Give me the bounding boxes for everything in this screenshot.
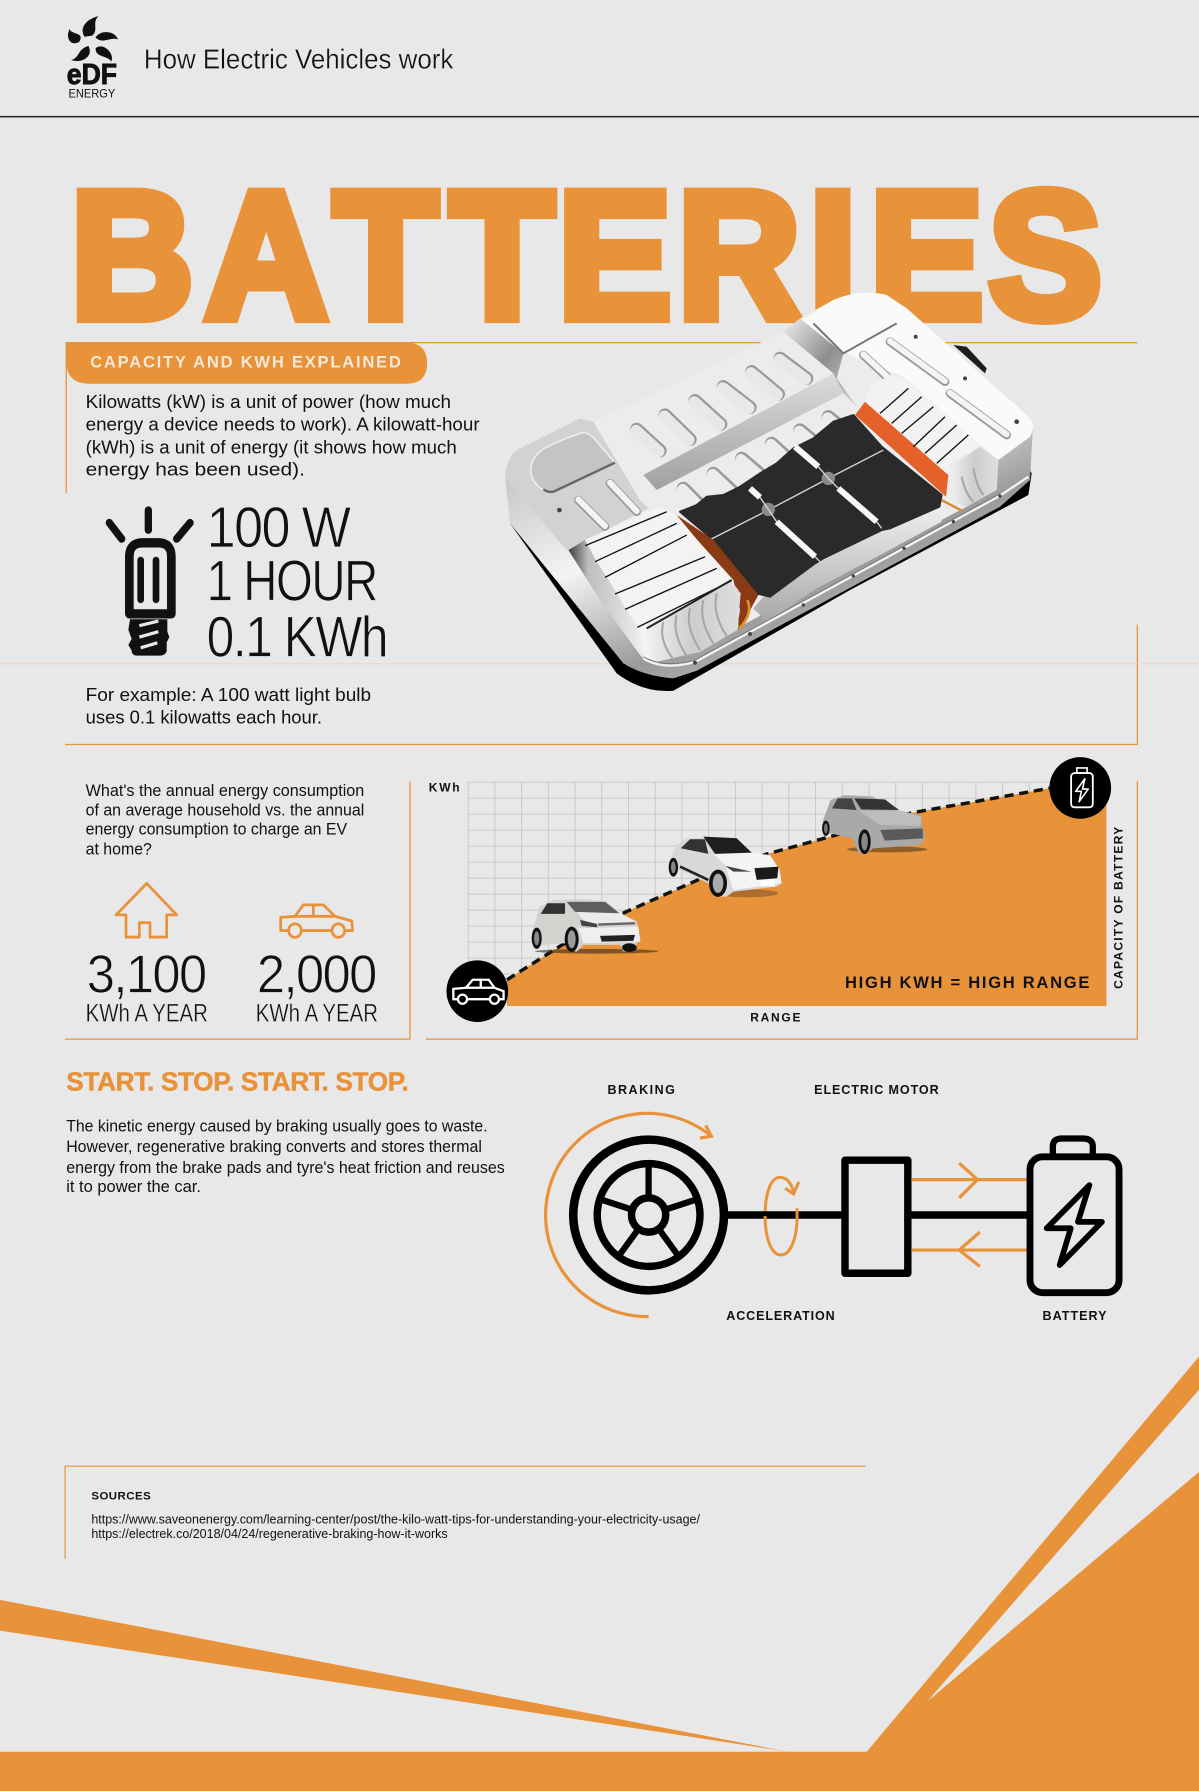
text block: light bulb example: For example: A 100 watt light bulb (86, 684, 371, 705)
rotation arrow: axle front (765, 1208, 797, 1255)
logo: EDF Energy: ENERGY (69, 87, 115, 101)
diagram: regenerative braking (546, 1083, 1119, 1323)
stat: household 3,100 kWh (86, 944, 208, 1027)
y-axis label: KWh (429, 780, 460, 794)
text block: kilowatts explanation: energy a device needs to work). A kilowatt-hour (86, 414, 480, 435)
text block: regenerative braking: However, regenerative braking converts and stores thermal (66, 1137, 482, 1156)
main heading: BATTERIES (71, 155, 1102, 357)
icon: car badge (446, 960, 508, 1022)
stat: 100 W 1 hour 0.1 kWh (207, 496, 387, 670)
right cell stack (865, 375, 982, 475)
logo: EDF Energy (67, 17, 117, 101)
stat: EV 2,000 kWh (256, 944, 378, 1027)
text block: regenerative braking: it to power the car. (66, 1177, 201, 1196)
stat: household 3,100 kWh: 3,100 (87, 944, 206, 1004)
x-axis label: RANGE (750, 1010, 800, 1024)
chart area (507, 782, 1107, 1006)
text block: annual consumption question: of an average household vs. the annual (86, 800, 364, 819)
text block: kilowatts explanation: Kilowatts (kW) is a unit of power (how much (86, 391, 451, 412)
label: battery: BATTERY (1043, 1309, 1107, 1323)
left cell stack (568, 507, 740, 662)
car photo: white hatchback (532, 899, 658, 954)
text block: annual consumption question: at home? (86, 840, 152, 859)
icon: wheel (573, 1140, 724, 1290)
stat: EV 2,000 kWh: 2,000 (257, 944, 376, 1004)
icon: battery (1030, 1138, 1119, 1293)
arrow: battery to motor (911, 1232, 1027, 1266)
chart: battery capacity against range (429, 757, 1125, 1024)
logo: EDF Energy: eDF (67, 59, 117, 91)
stat: 100 W 1 hour 0.1 kWh: 100 W (207, 496, 351, 560)
icon: car (281, 905, 353, 937)
panel: sources (65, 1466, 866, 1559)
electric motor box (845, 1160, 908, 1273)
text block: light bulb example: uses 0.1 kilowatts each hour. (86, 706, 322, 727)
panel frame: capacity section (65, 343, 1137, 745)
car photo: white SUV (669, 837, 782, 897)
panel frame: chart (426, 781, 1137, 1039)
text block: annual consumption question (86, 781, 364, 859)
text block: kilowatts explanation (86, 391, 480, 480)
stat: 100 W 1 hour 0.1 kWh: 1 HOUR (207, 550, 377, 614)
top plate (505, 293, 1033, 630)
footer orange shapes (0, 1357, 1199, 1791)
text block: annual consumption question: energy consumption to charge an EV (86, 820, 348, 839)
axle lines (727, 1212, 1028, 1218)
panel: sources: https://www.saveonenergy.com/learning-center/post/the-kilo-watt-tips-for-understanding-your-electricity-usage/ (91, 1512, 700, 1526)
panel frame: household consumption (65, 781, 410, 1039)
chart caption: HIGH KWH = HIGH RANGE (845, 973, 1089, 992)
cells (753, 498, 942, 622)
text block: light bulb example (86, 684, 371, 727)
text block: regenerative braking: The kinetic energy caused by braking usually goes to waste. (66, 1117, 488, 1136)
dashed trend line (507, 788, 1050, 980)
raised bar (643, 373, 843, 490)
text block: kilowatts explanation: (kWh) is a unit of energy (it shows how much (86, 436, 457, 457)
base rim (643, 477, 1028, 666)
icon: battery badge (1049, 757, 1111, 819)
text block: kilowatts explanation: energy has been used). (86, 459, 305, 480)
header rule (0, 116, 1199, 117)
label: acceleration: ACCELERATION (726, 1309, 835, 1323)
text block: regenerative braking (66, 1117, 505, 1196)
illustration: battery pack (505, 293, 1033, 691)
rivets (557, 335, 1019, 665)
orange strip (855, 402, 948, 497)
heading: start stop: START. STOP. START. STOP. (66, 1067, 409, 1097)
right axis label: CAPACITY OF BATTERY (1111, 827, 1125, 989)
icon: light bulb (109, 510, 190, 656)
label: braking: BRAKING (607, 1083, 675, 1097)
faint horizontal divider (0, 662, 1199, 665)
rotation arrow: axle back (765, 1177, 799, 1216)
section pill: capacity and kWh (66, 343, 427, 384)
plate slots (578, 341, 1007, 527)
text block: annual consumption question: What's the annual energy consumption (86, 781, 364, 800)
stat: 100 W 1 hour 0.1 kWh: 0.1 KWh (207, 606, 387, 670)
panel: sources: https://electrek.co/2018/04/24/regenerative-braking-how-it-works (91, 1527, 448, 1541)
label: electric motor: ELECTRIC MOTOR (814, 1083, 939, 1097)
header title: How Electric Vehicles work (144, 44, 454, 75)
rotation arrow: wheel (546, 1113, 711, 1317)
stat: EV 2,000 kWh: KWh A YEAR (256, 999, 378, 1027)
icon: house (116, 883, 177, 937)
stat: household 3,100 kWh: KWh A YEAR (86, 999, 208, 1027)
lower slots (683, 417, 845, 510)
text block: regenerative braking: energy from the brake pads and tyre's heat friction and reuses (66, 1158, 505, 1177)
section pill: capacity and kWh: CAPACITY AND KWH EXPLAINED (90, 353, 401, 372)
arrow: motor to battery (911, 1163, 1027, 1198)
copper strip (677, 515, 758, 630)
car photo: grey SUV (822, 795, 927, 854)
panel: sources: SOURCES (91, 1490, 151, 1502)
